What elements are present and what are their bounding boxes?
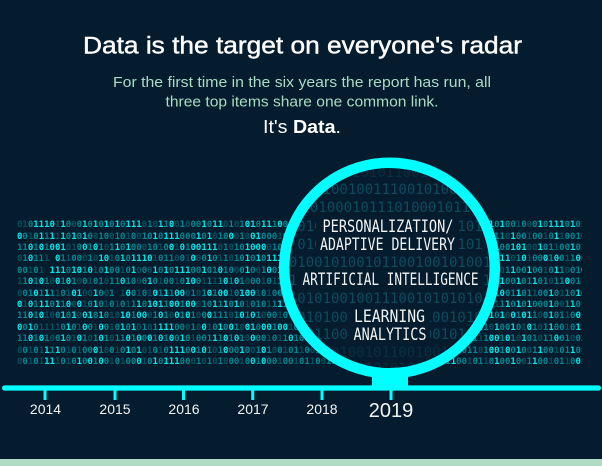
- label backings: [296, 218, 484, 344]
- lens labels: [302, 217, 478, 344]
- lens labels: ADAPTIVE DELIVERY: [320, 235, 455, 254]
- binary data field: [17, 220, 582, 367]
- bottom band: [0, 459, 602, 466]
- magnified binary digits: 0101001001110010101010: [297, 291, 483, 307]
- year labels: 2019: [369, 400, 413, 422]
- callout: It's Data: It's Data.: [263, 117, 341, 137]
- year labels: 2015: [99, 401, 131, 417]
- lens labels: ARTIFICIAL INTELLIGENCE: [302, 270, 478, 289]
- magnified binary digits: 0110101100101: [335, 165, 445, 181]
- lens interior: [290, 168, 490, 368]
- magnified binary digits: 01100100101101001010: [306, 327, 474, 343]
- lens labels: PERSONALIZATION/: [322, 217, 454, 236]
- lens labels: LEARNING: [354, 307, 425, 326]
- year labels: 2014: [30, 401, 61, 417]
- magnified binary digits: 0100010111010001011: [310, 200, 470, 216]
- subtitle: three top items share one common link.: [166, 94, 438, 110]
- magnified binary digits: 110101001001010010101001: [289, 273, 491, 289]
- magnified binary digits: 0100101011001001010101: [297, 237, 483, 253]
- timeline axis: [2, 385, 601, 400]
- subtitle: For the first time in the six years the report has run, all: [113, 74, 491, 91]
- lens ring: [284, 163, 495, 373]
- magnified binary digits: [289, 165, 491, 377]
- magnified binary digits: 0010010110010010: [323, 345, 457, 361]
- magnified binary digits: 1010101001: [348, 361, 432, 377]
- magnified binary digits: 0101001010010101001010: [297, 310, 483, 326]
- magnified binary digits: 1001001110010100: [323, 182, 457, 198]
- year labels: 2016: [168, 401, 200, 417]
- lens labels: ANALYTICS: [354, 325, 426, 344]
- title: Data is the target on everyone's radar: [83, 32, 522, 60]
- year labels: 2018: [306, 401, 338, 417]
- year labels: 2017: [237, 401, 269, 417]
- lens stem: [372, 372, 408, 387]
- magnified binary digits: 0101001011001001010101: [297, 219, 483, 235]
- subtitle: [113, 74, 491, 110]
- magnified binary digits: 010010100101100100101001: [289, 255, 491, 271]
- year labels: [30, 400, 413, 422]
